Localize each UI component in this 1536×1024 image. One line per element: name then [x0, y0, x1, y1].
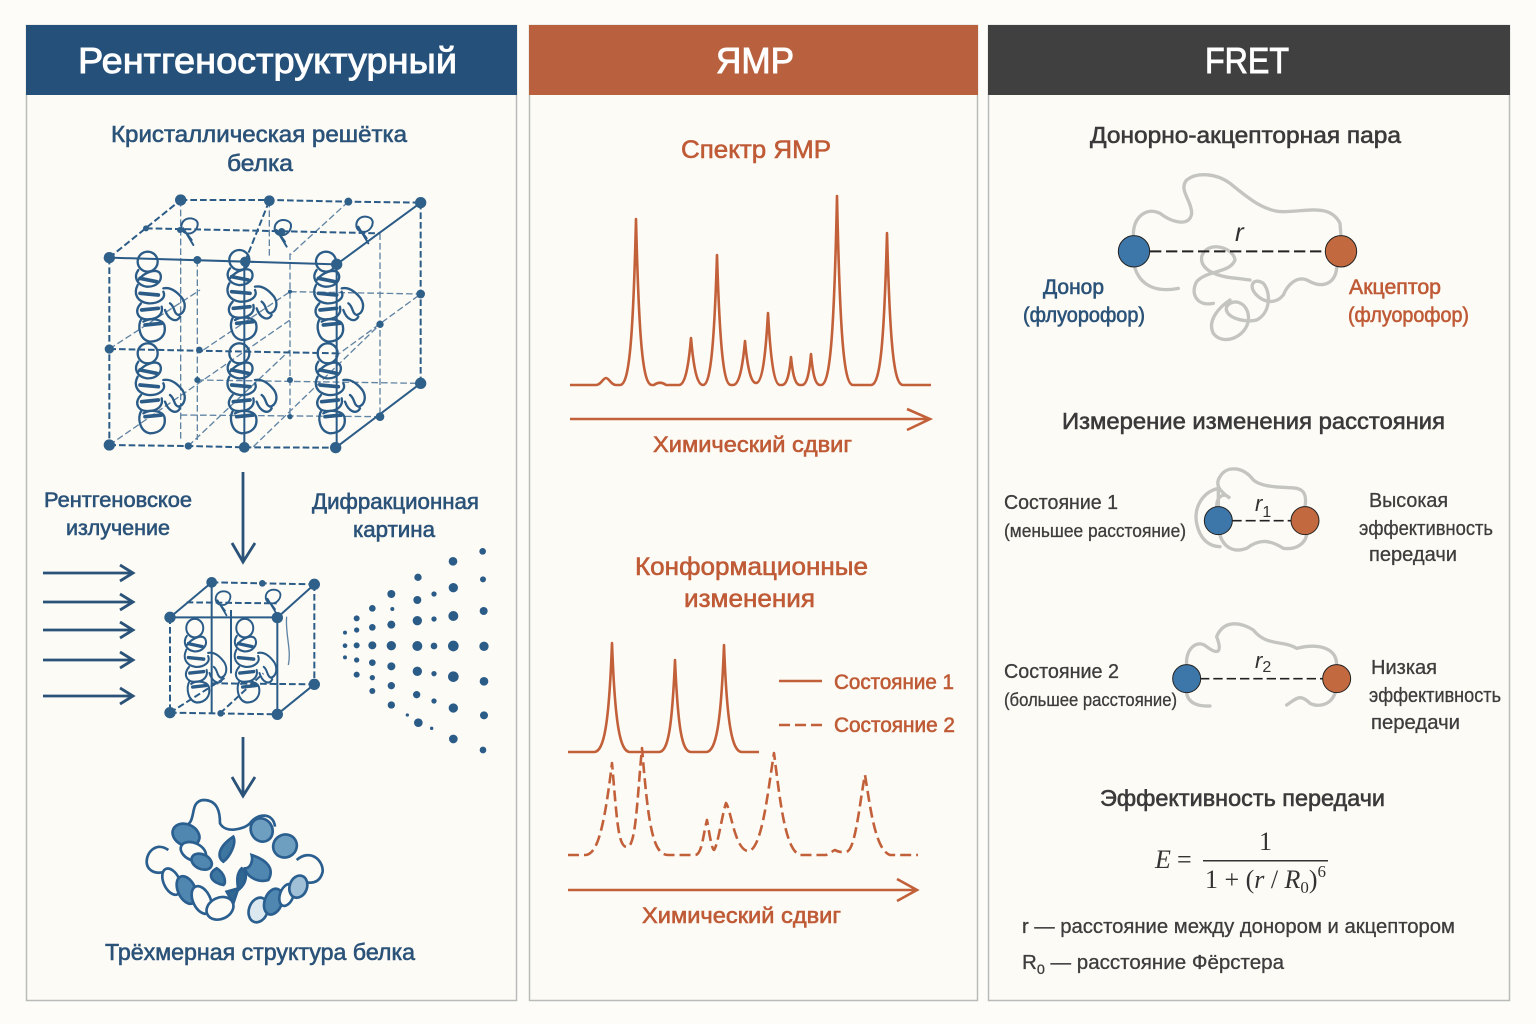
heading: NMR: ЯМР — [716, 40, 794, 81]
formula: FRET efficiency: 6 — [1318, 862, 1326, 881]
subheading: donor-acceptor pair: Донорно-акцепторная пара — [1090, 122, 1401, 148]
chart: state 2 spectrum — [568, 748, 918, 855]
heading: FRET — [988, 25, 1510, 95]
diagram: small crystal in beam — [164, 577, 320, 720]
panel: X-ray crystallography — [26, 25, 517, 1000]
subheading: conformational changes: изменения — [684, 585, 815, 613]
label: high efficiency: Высокая — [1369, 490, 1448, 512]
icon: incoming X-ray arrows — [43, 565, 133, 704]
caption: 3D protein structure: Трёхмерная структура белка — [105, 939, 415, 965]
label: state 1 — [1004, 492, 1186, 541]
heading: FRET: FRET — [1205, 40, 1289, 81]
legend: states: Состояние 1 — [834, 671, 954, 694]
diagram: state 1 chain — [1196, 469, 1319, 550]
label: diffraction pattern: Дифракционная — [312, 489, 479, 514]
label: state 1: Состояние 1 — [1004, 492, 1118, 514]
label: r1: r — [1255, 491, 1262, 516]
arrow: chemical shift axis — [570, 409, 930, 430]
label: low efficiency: передачи — [1371, 712, 1460, 734]
label: donor — [1023, 276, 1145, 327]
diagram: protein crystal lattice cube — [104, 194, 426, 453]
formula: FRET efficiency: E — [1154, 845, 1171, 874]
subheading: NMR spectrum: Спектр ЯМР — [681, 136, 831, 164]
heading: X-ray: Рентгеноструктурный — [78, 40, 457, 81]
label: acceptor: Акцептор — [1349, 276, 1441, 299]
subheading: crystal lattice: белка — [227, 150, 293, 176]
subheading: measuring distance change: Измерение изменения расстояния — [1062, 408, 1445, 434]
panel: FRET — [988, 25, 1510, 1000]
arrow: crystal to structure — [232, 737, 255, 796]
label: low efficiency — [1369, 657, 1501, 734]
formula: FRET efficiency: ) — [1309, 865, 1318, 894]
legend: R0 definition: — расстояние Фёрстера — [1045, 952, 1285, 974]
label: donor: Донор — [1043, 276, 1104, 299]
arrow: chemical shift axis 2 — [568, 879, 917, 901]
label: state 2 — [1004, 661, 1177, 710]
label: low efficiency: эффективность — [1369, 685, 1501, 707]
legend: R0 definition: 0 — [1037, 961, 1045, 977]
arrow: lattice down to beam — [232, 472, 255, 562]
formula: FRET efficiency: 1 + (r / R — [1205, 865, 1300, 894]
label: donor: (флуорофор) — [1023, 304, 1145, 327]
label: diffraction pattern — [312, 489, 479, 542]
label: state 2: (большее расстояние) — [1004, 690, 1177, 710]
heading: NMR — [529, 25, 978, 95]
label: distance r: r — [1235, 217, 1245, 247]
axis label: chemical shift 2: Химический сдвиг — [642, 903, 841, 928]
label: state 2: Состояние 2 — [1004, 661, 1119, 683]
panel: NMR — [529, 25, 978, 1000]
legend: R0 definition: R — [1022, 952, 1036, 974]
label: r2: 2 — [1262, 659, 1271, 676]
subheading: crystal lattice — [111, 121, 407, 176]
label: high efficiency — [1359, 490, 1493, 566]
subheading: conformational changes — [635, 553, 868, 613]
diagram: state 2 chain — [1173, 624, 1351, 706]
formula: FRET efficiency: = — [1177, 845, 1192, 874]
subheading: conformational changes: Конформационные — [635, 553, 868, 581]
legend: r definition: r — расстояние между донором и акцептором — [1022, 916, 1455, 938]
label: r1: 1 — [1262, 504, 1271, 521]
formula: FRET efficiency: 1 — [1259, 827, 1272, 856]
label: state 1: (меньшее расстояние) — [1004, 521, 1186, 541]
label: acceptor — [1348, 276, 1469, 327]
formula: FRET efficiency: 0 — [1300, 878, 1309, 897]
label: low efficiency: Низкая — [1371, 657, 1437, 679]
heading: X-ray — [26, 25, 517, 95]
legend: states — [779, 671, 955, 737]
chart: state 1 spectrum — [568, 643, 759, 752]
label: acceptor: (флуорофор) — [1348, 304, 1469, 327]
legend: states: Состояние 2 — [834, 714, 955, 737]
label: X-ray radiation — [44, 489, 192, 540]
label: r2: r — [1255, 648, 1262, 673]
label: diffraction pattern: картина — [353, 517, 436, 542]
label: high efficiency: передачи — [1369, 544, 1457, 566]
label: high efficiency: эффективность — [1359, 518, 1493, 540]
label: X-ray radiation: Рентгеновское — [44, 489, 192, 512]
subheading: transfer efficiency: Эффективность передачи — [1100, 785, 1385, 811]
chart: NMR spectrum — [570, 196, 931, 385]
formula: FRET efficiency — [1154, 827, 1328, 897]
diagram: donor-acceptor pair on chain — [1118, 175, 1357, 340]
diagram: 3D protein structure — [147, 800, 323, 925]
axis label: chemical shift: Химический сдвиг — [653, 432, 852, 457]
chart: diffraction spot pattern — [343, 548, 489, 753]
label: X-ray radiation: излучение — [66, 517, 170, 540]
subheading: crystal lattice: Кристаллическая решётка — [111, 121, 407, 147]
